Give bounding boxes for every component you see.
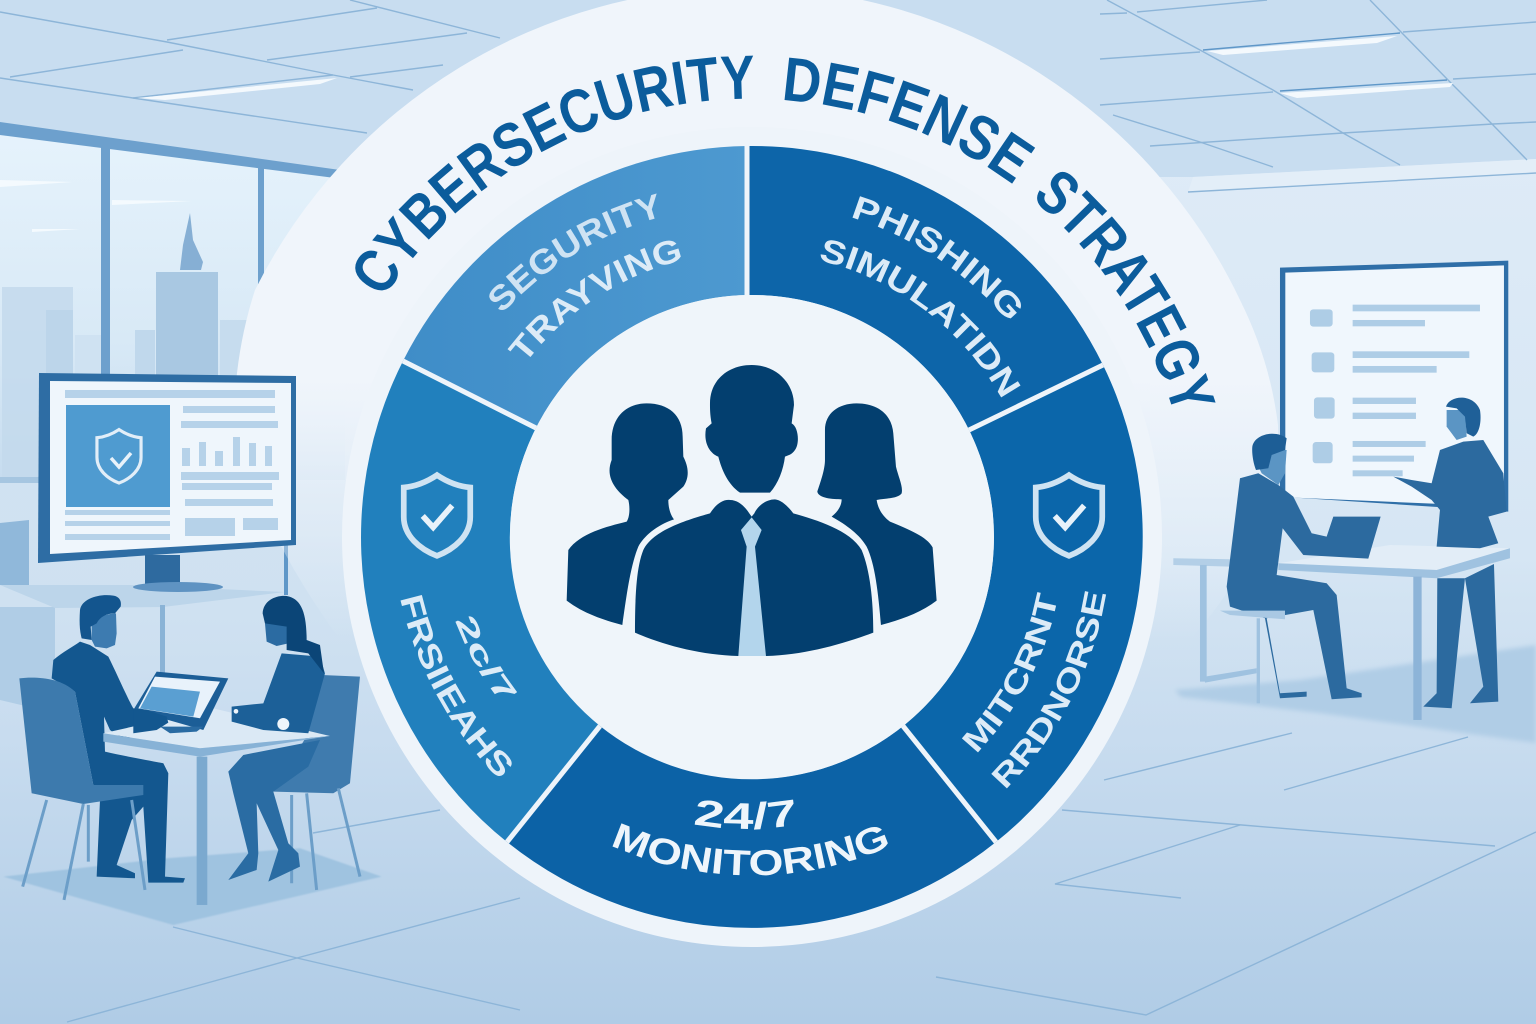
table — [103, 708, 330, 905]
segment labels: SIMULATIDN — [820, 240, 1020, 398]
segment labels: 24/7 — [694, 800, 794, 830]
desk — [1173, 545, 1510, 720]
segment labels — [400, 194, 1106, 876]
white circular backdrop — [236, 0, 1278, 947]
title — [355, 56, 1216, 404]
icon: shield right — [1036, 475, 1102, 556]
segment labels: MONITORING — [612, 823, 888, 876]
segment labels: FRSIIEAHS — [400, 595, 512, 776]
segment labels: SEGURITY — [489, 194, 657, 310]
segment labels: TRAYVING — [508, 240, 681, 357]
segment: security training — [403, 146, 747, 428]
woman upper body — [232, 596, 325, 733]
scene: meeting at table, left — [3, 595, 382, 925]
segment labels: MITCRNT — [962, 592, 1056, 752]
center disc — [510, 295, 994, 779]
window with skyline — [0, 122, 345, 483]
defense ring — [361, 146, 1143, 928]
monitor — [38, 373, 296, 592]
laptop — [133, 672, 228, 733]
icon: shield left — [404, 475, 470, 556]
segment: incident response — [903, 365, 1143, 842]
chair right — [273, 675, 360, 890]
standing presenter — [1393, 398, 1507, 708]
title: STRATEGY — [1037, 172, 1216, 404]
segment: monitoring — [507, 726, 996, 928]
woman lower body — [228, 740, 320, 882]
man — [52, 595, 185, 883]
seated man — [1220, 434, 1381, 703]
icon: monitor shield panel — [66, 405, 170, 507]
chair left — [19, 678, 145, 900]
whiteboard — [1280, 261, 1508, 512]
title: DEFENSE — [784, 58, 1036, 184]
scene: whiteboard discussion, right — [1173, 261, 1510, 720]
segment labels: PHISHING — [852, 196, 1021, 318]
segment: left — [361, 361, 600, 842]
floor shadow — [3, 848, 382, 925]
segment labels: RRDNORSE — [991, 591, 1106, 788]
segment labels: 2c/7 — [456, 616, 517, 694]
icon: team silhouettes — [567, 365, 937, 656]
left desk background — [0, 520, 288, 713]
segment: phishing simulation — [747, 146, 1103, 430]
title: CYBERSECURITY — [355, 56, 754, 290]
